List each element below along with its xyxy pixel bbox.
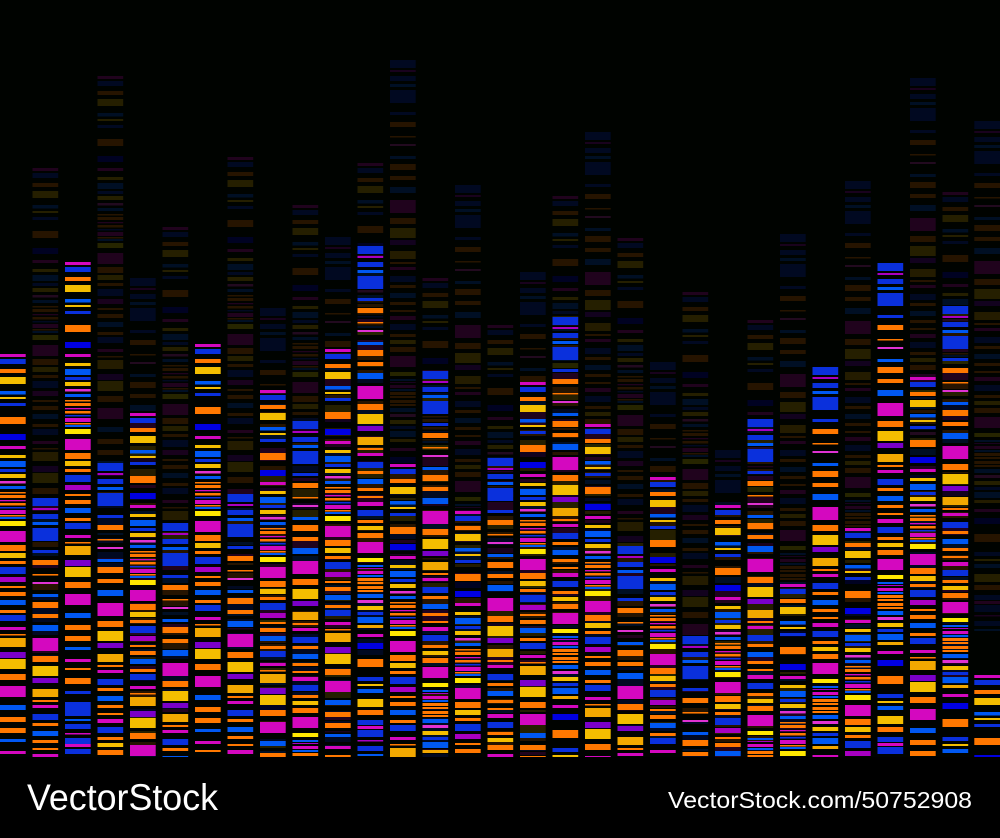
- footer strip: [0, 757, 1000, 838]
- footer logo text: VectorStock: [27, 776, 218, 818]
- band column 16: [488, 325, 513, 779]
- band column 19: [585, 132, 611, 803]
- band column 10: [292, 205, 318, 798]
- band column 5: [130, 278, 156, 792]
- band column 11: [325, 237, 351, 803]
- band column 13: [390, 60, 416, 768]
- band column 3: [65, 262, 91, 754]
- band column 9: [260, 308, 286, 769]
- band column 8: [228, 157, 253, 801]
- band column 18: [552, 196, 578, 764]
- band column 27: [845, 181, 871, 832]
- band column 21: [650, 362, 676, 809]
- band column 6: [162, 227, 188, 830]
- band column 17: [520, 272, 546, 782]
- band column 14: [422, 278, 448, 818]
- band column 15: [455, 185, 481, 815]
- band column 26: [812, 367, 838, 814]
- band column 22: [682, 292, 708, 789]
- band column 28: [878, 263, 903, 773]
- band column 7: [195, 344, 221, 798]
- band column 2: [32, 168, 58, 805]
- band column 25: [780, 234, 806, 812]
- band column 24: [748, 320, 773, 796]
- band column 31: [974, 121, 1000, 826]
- band column 20: [618, 238, 643, 768]
- band column 29: [910, 78, 936, 831]
- footer image id text: VectorStock.com/50752908: [668, 787, 972, 813]
- band column 30: [942, 192, 968, 816]
- band column 1: [0, 354, 26, 808]
- band column 12: [358, 163, 383, 756]
- band column 4: [98, 76, 123, 770]
- band column 23: [715, 450, 741, 827]
